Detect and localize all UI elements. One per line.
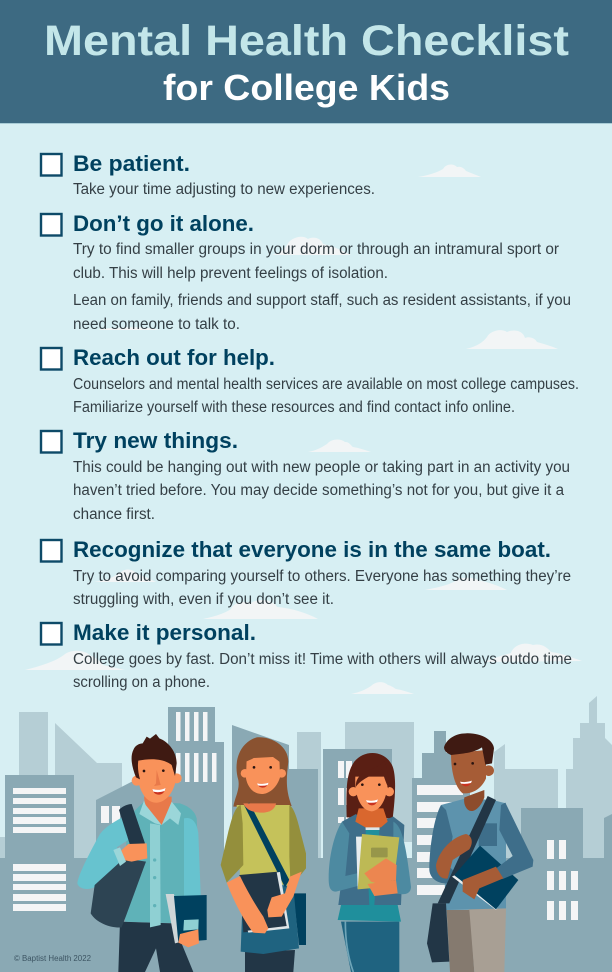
checklist item: Reach out for help	[41, 345, 579, 416]
clouds	[25, 165, 582, 694]
checklist item: Don't go it alone	[41, 211, 571, 333]
far buildings	[0, 696, 612, 952]
body text: Try to avoid comparing yourself to others. Everyone has something they’re	[73, 568, 571, 585]
checklist item: Try new things	[41, 428, 570, 523]
body text: This could be hanging out with new people or taking part in an activity you	[73, 459, 570, 476]
heading: Reach out for help.	[73, 345, 275, 370]
heading: Recognize that everyone is in the same boat.	[73, 537, 551, 562]
title: Mental Health Checklist	[44, 17, 569, 65]
body text	[73, 459, 570, 523]
near buildings	[0, 707, 612, 972]
checkbox	[41, 154, 62, 176]
heading: Be patient.	[73, 151, 190, 176]
checkbox	[41, 348, 62, 370]
subtitle: for College Kids	[163, 67, 450, 108]
body text: Familiarize yourself with these resources and find contact info online.	[73, 399, 515, 416]
body text: Try to find smaller groups in your dorm or through an intramural sport or	[73, 241, 559, 258]
heading: Don’t go it alone.	[73, 211, 254, 236]
checkbox	[41, 431, 62, 452]
windows	[13, 712, 578, 920]
checkbox	[41, 623, 62, 644]
body text: College goes by fast. Don’t miss it! Time with others will always outdo time	[73, 651, 572, 668]
heading: Make it personal.	[73, 620, 256, 645]
body text: scrolling on a phone.	[73, 674, 210, 691]
body text: struggling with, even if you don’t see it.	[73, 591, 334, 608]
body text	[73, 376, 579, 416]
checklist item: Make it personal	[41, 620, 572, 691]
illustration: student 4 with book	[427, 733, 533, 972]
checklist item: Be patient	[41, 151, 375, 198]
body text: club. This will help prevent feelings of isolation.	[73, 265, 388, 282]
city skyline	[0, 696, 612, 972]
body text: Counselors and mental health services are available on most college campuses.	[73, 376, 579, 393]
checkbox	[41, 540, 62, 562]
checklist item: Recognize that everyone is in the same boat	[41, 537, 571, 608]
checkbox	[41, 214, 62, 236]
body text	[73, 241, 571, 333]
body text: need someone to talk to.	[73, 316, 240, 333]
body text: Lean on family, friends and support staff, such as resident assistants, if you	[73, 292, 571, 309]
body text	[73, 568, 571, 608]
illustration: student 3 holding notebook	[329, 753, 411, 972]
illustration: student 1 with backpack	[77, 734, 207, 972]
body text: Take your time adjusting to new experiences.	[73, 181, 375, 198]
body text: haven’t tried before. You may decide something’s not for you, but give it a	[73, 482, 564, 499]
body text	[73, 651, 572, 691]
body text: chance first.	[73, 506, 155, 523]
heading: Try new things.	[73, 428, 238, 453]
title banner	[0, 0, 612, 124]
copyright: © Baptist Health 2022	[14, 954, 92, 963]
illustration: student 2 with shoulder bag	[221, 737, 306, 972]
